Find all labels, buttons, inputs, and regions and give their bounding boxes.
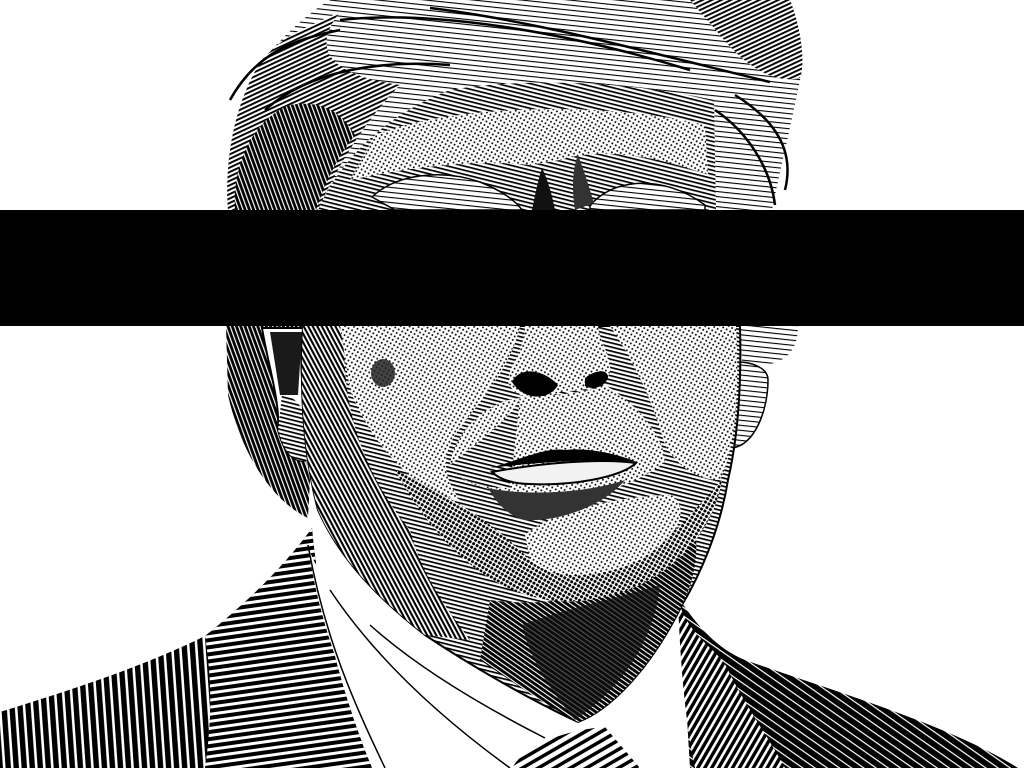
neck shadow xyxy=(480,530,696,722)
cheek right stipple xyxy=(610,326,737,480)
suit jacket: left xyxy=(0,528,372,768)
necktie xyxy=(512,727,640,768)
mark on cheek xyxy=(371,359,395,387)
hair: right side below bar xyxy=(740,326,798,364)
left cheek side hatching xyxy=(302,326,470,640)
left ear xyxy=(262,328,316,461)
shirt collar xyxy=(308,545,682,768)
frown lines xyxy=(532,168,555,210)
cheek left stipple xyxy=(340,326,520,500)
hair strands xyxy=(230,8,788,205)
nose xyxy=(508,326,610,398)
forehead xyxy=(318,83,716,210)
hair: left side below bar xyxy=(226,326,310,518)
brow right xyxy=(590,183,705,210)
lower face xyxy=(302,326,740,722)
brow left xyxy=(372,175,522,210)
suit jacket: right xyxy=(678,600,1018,768)
black censor bar xyxy=(0,210,1024,326)
jaw stipple xyxy=(395,470,722,601)
upper lip and muzzle xyxy=(450,385,665,520)
chin xyxy=(525,495,681,575)
right ear xyxy=(732,362,768,448)
hair: top xyxy=(227,0,802,210)
mouth xyxy=(490,449,637,468)
